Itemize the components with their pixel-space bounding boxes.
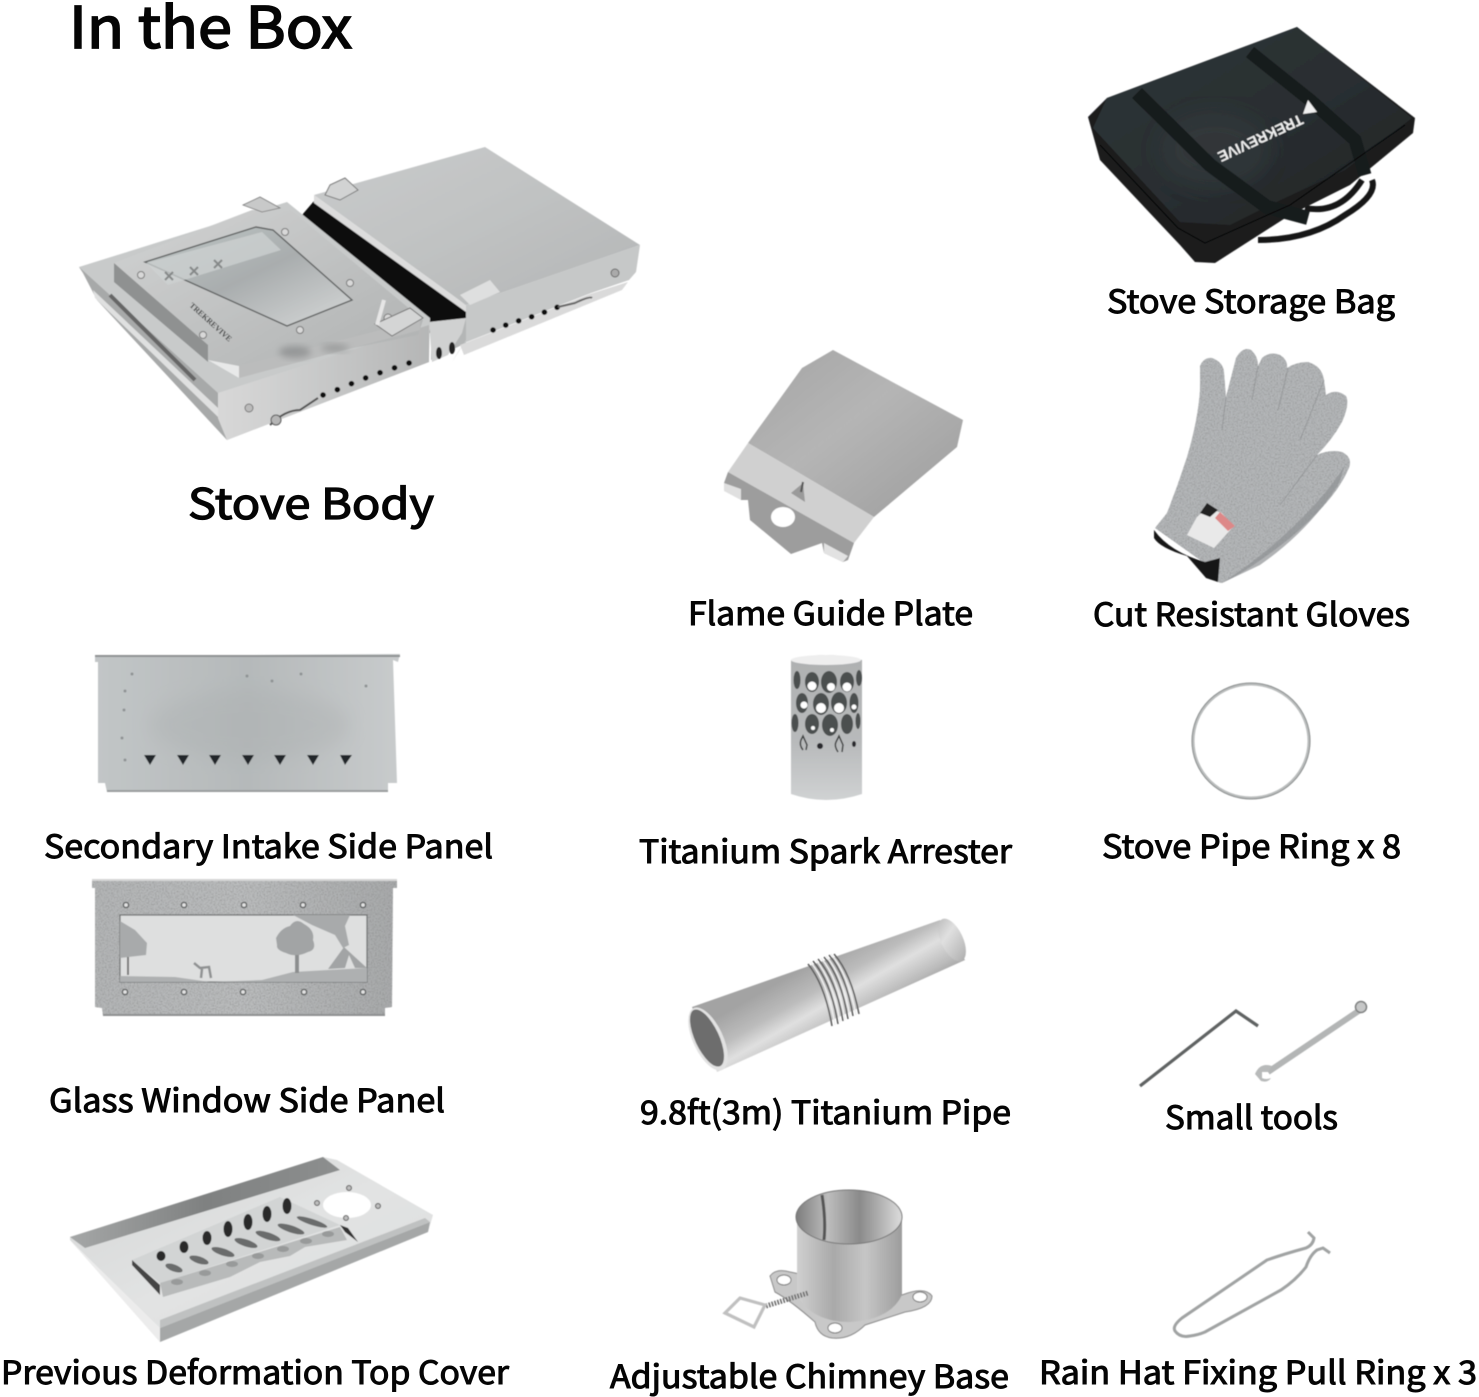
image: gloves	[1154, 349, 1350, 583]
image: stove body	[79, 147, 640, 440]
panel bolts	[122, 902, 366, 995]
item: glass window side panel	[49, 879, 445, 1122]
item: secondary intake side panel	[44, 654, 493, 868]
label: pipe: 9.8ft(3m) Titanium Pipe	[640, 1088, 1011, 1134]
item: stove pipe ring	[1102, 683, 1401, 868]
chimney hole	[323, 1192, 371, 1218]
item: previous deformation top cover	[1, 1157, 510, 1394]
image: chimney base	[725, 1190, 932, 1338]
label: ring: Stove Pipe Ring x 8	[1102, 822, 1401, 868]
label: flame guide plate: Flame Guide Plate	[688, 589, 973, 635]
image: pull ring	[1174, 1232, 1330, 1336]
plate logo	[791, 483, 805, 502]
bag straps	[1137, 93, 1308, 218]
item: titanium spark arrester	[639, 655, 1013, 873]
grate plate	[132, 1197, 340, 1283]
image: tools	[1140, 1002, 1366, 1086]
window cutout scene	[120, 915, 367, 982]
left block	[79, 202, 430, 440]
spring	[766, 1293, 808, 1306]
item: cut resistant gloves	[1093, 349, 1410, 636]
label: cut resistant gloves: Cut Resistant Gloves	[1093, 590, 1410, 636]
square loop	[725, 1298, 765, 1327]
glove label	[1187, 508, 1233, 548]
label: stove body: Stove Body	[188, 471, 434, 532]
label: tools: Small tools	[1165, 1093, 1338, 1139]
glove cuff	[1154, 530, 1220, 582]
image: top cover	[70, 1157, 433, 1342]
item: rain hat fixing pull ring	[1039, 1232, 1477, 1394]
bag logo text: TREKREVIVE	[1215, 110, 1305, 165]
black gap	[302, 201, 466, 334]
label: top cover: Previous Deformation Top Cover	[1, 1348, 510, 1394]
image: intake panel	[95, 654, 400, 792]
window frame	[114, 210, 423, 378]
label: chimney base: Adjustable Chimney Base	[610, 1352, 1009, 1397]
item: stove body	[79, 147, 640, 532]
image: pipe	[680, 915, 972, 1076]
item: adjustable chimney base	[610, 1190, 1009, 1397]
image: spark arrester	[791, 655, 862, 800]
label: window panel: Glass Window Side Panel	[49, 1076, 445, 1122]
label: spark arrester: Titanium Spark Arrester	[639, 827, 1013, 873]
label: intake panel: Secondary Intake Side Panel	[44, 822, 493, 868]
wound wire rings	[808, 954, 859, 1026]
item: flame guide plate	[688, 350, 973, 635]
right block	[314, 147, 640, 305]
image: stove body: TREKREVIVE	[188, 301, 234, 343]
image: storage bag	[1088, 27, 1415, 263]
label: stove storage bag: Stove Storage Bag	[1107, 277, 1395, 323]
item: titanium pipe	[640, 915, 1011, 1134]
label: pull ring: Rain Hat Fixing Pull Ring x 3	[1039, 1348, 1477, 1394]
item: small tools	[1140, 1002, 1366, 1139]
item: stove storage bag	[1088, 27, 1415, 323]
image: window panel	[92, 879, 397, 1016]
bolts	[138, 228, 392, 338]
image: flame guide plate	[724, 350, 963, 562]
image: ring	[1192, 683, 1310, 799]
glass window	[145, 227, 352, 326]
